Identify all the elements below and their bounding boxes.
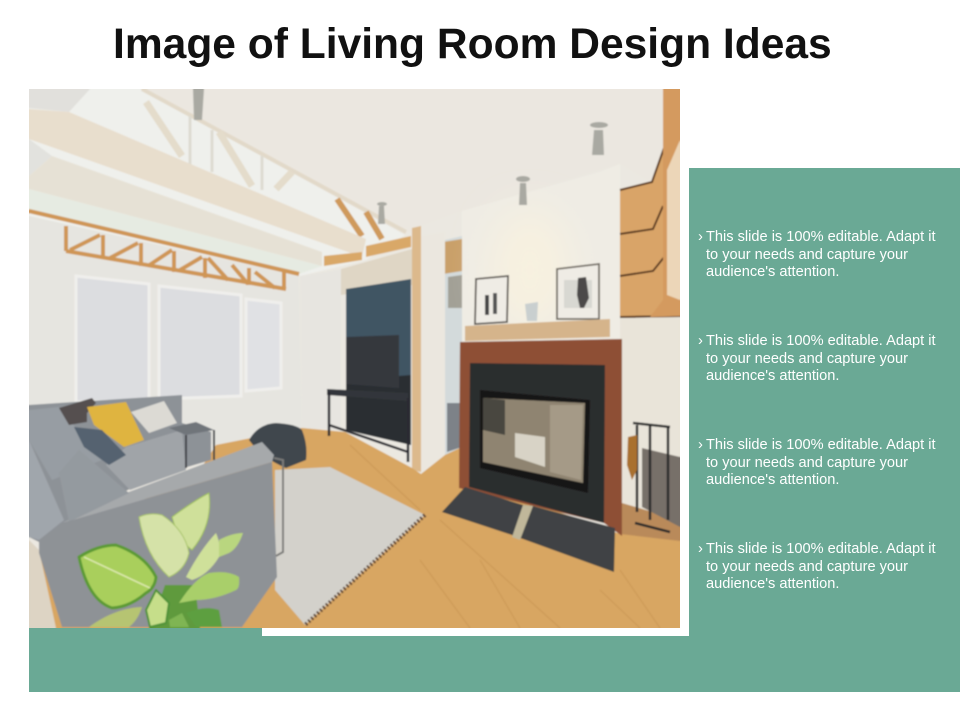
sofa	[29, 395, 277, 627]
window blinds	[76, 276, 281, 402]
panel: white photo mat	[262, 168, 689, 636]
door frame room beyond	[445, 236, 462, 456]
text block: bullet 3: to your needs and capture your	[706, 454, 908, 470]
text block: bullet 2: audience's attention.	[706, 368, 839, 384]
text block: bullet 4: This slide is 100% editable. Adapt it	[706, 541, 936, 557]
plant	[79, 493, 243, 628]
panel: teal background	[29, 168, 960, 692]
timber beams	[29, 109, 366, 257]
roof struts and ridge	[142, 89, 406, 239]
skylight glazing	[29, 89, 405, 276]
orange truss	[29, 211, 299, 290]
framed pictures	[475, 264, 599, 324]
text block: bullet 3: This slide is 100% editable. Adapt it	[706, 437, 936, 453]
text block: bullet 1: audience's attention.	[706, 264, 839, 280]
pouf	[249, 423, 306, 468]
area rug	[275, 467, 425, 625]
title: Image of Living Room Design Ideas	[113, 20, 832, 68]
text block: bullet 4: ›	[698, 541, 703, 557]
text block: bullet 3	[698, 437, 936, 488]
text block: bullet 1: This slide is 100% editable. Adapt it	[706, 229, 936, 245]
text block: bullet 1: ›	[698, 229, 703, 245]
chalkboard wall	[346, 279, 411, 445]
text block: bullet 4	[698, 541, 936, 592]
text block: bullet 4: to your needs and capture your	[706, 558, 908, 574]
text block: bullet 1	[698, 229, 936, 280]
mantel	[465, 319, 610, 341]
text block: bullet 2	[698, 333, 936, 384]
wood panel above chalkboard	[341, 249, 412, 295]
text block: bullet 2: This slide is 100% editable. Adapt it	[706, 333, 936, 349]
doorway post and door	[421, 232, 445, 472]
text block: bullet 3: ›	[698, 437, 703, 453]
hearth	[442, 487, 615, 572]
wood floor	[29, 428, 680, 628]
right wall	[620, 316, 680, 522]
ceiling	[140, 89, 680, 235]
back wall panel	[300, 269, 341, 430]
cushions	[59, 398, 177, 465]
text block: bullet 2: ›	[698, 333, 703, 349]
fireplace surround	[459, 339, 622, 536]
text block: bullet 4: audience's attention.	[706, 576, 839, 592]
left wall	[29, 216, 302, 445]
wood shelves	[620, 89, 680, 317]
fireplace glass	[480, 390, 590, 493]
text block: bullet 2: to your needs and capture your	[706, 350, 908, 366]
side tables	[169, 422, 283, 556]
tv and stand	[327, 335, 408, 462]
image: living room photo	[29, 89, 680, 628]
text block: bullet 1: to your needs and capture your	[706, 246, 908, 262]
ceiling lights	[193, 89, 608, 224]
floor beside sofa	[29, 540, 56, 628]
chimney wall	[462, 164, 620, 342]
fire tools	[627, 423, 680, 532]
text block: bullet 3: audience's attention.	[706, 472, 839, 488]
